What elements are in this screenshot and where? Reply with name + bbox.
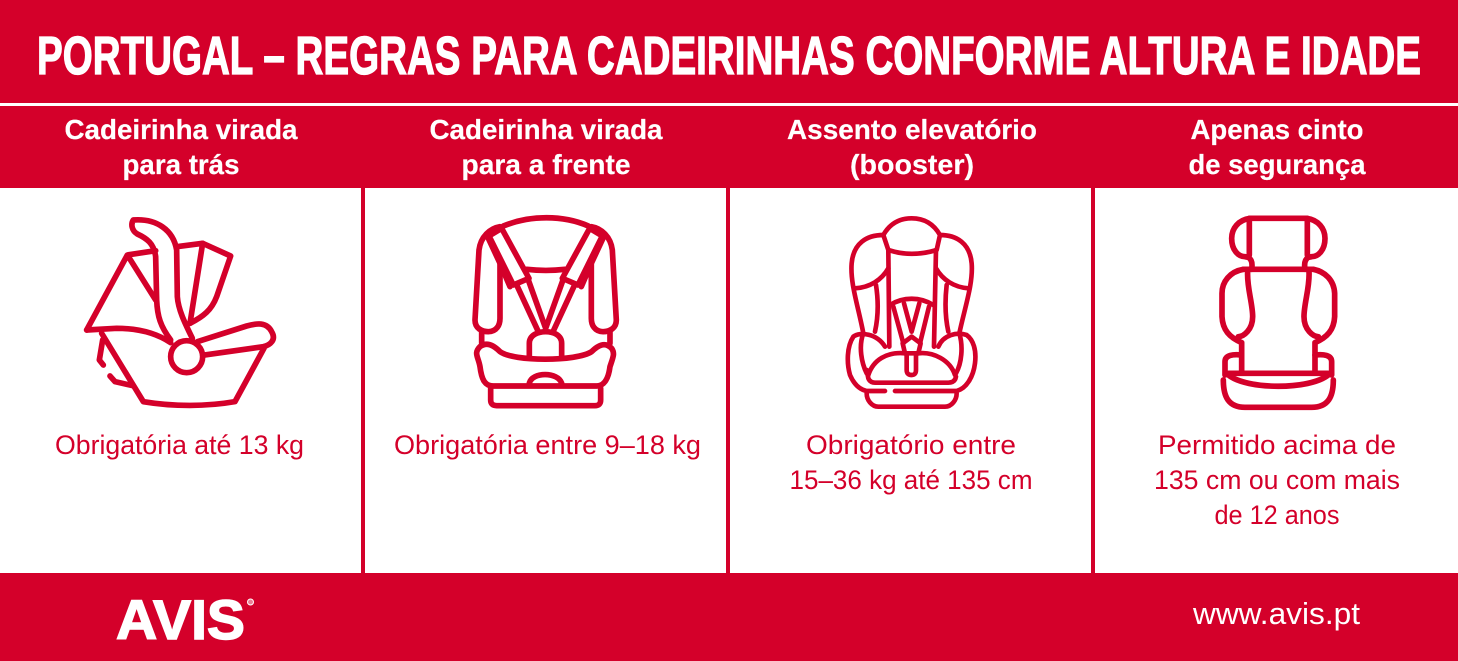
heading: seat belt only: Apenas cinto xyxy=(1190,114,1364,145)
panel: booster seat xyxy=(787,114,1037,495)
panel: forward-facing seat xyxy=(394,114,701,460)
heading: rear-facing seat: Cadeirinha virada xyxy=(64,114,298,145)
text: seat belt rule: de 12 anos xyxy=(1214,500,1340,530)
heading: booster seat: Assento elevatório xyxy=(787,114,1037,145)
footer band xyxy=(0,573,1458,661)
heading: rear-facing seat: para trás xyxy=(122,149,240,180)
title banner xyxy=(0,0,1458,103)
heading: forward-facing seat: para a frente xyxy=(462,149,630,180)
logo: AVIS: AVIS xyxy=(116,588,245,651)
icon: booster seat xyxy=(848,218,975,407)
panel: rear-facing seat xyxy=(55,114,304,460)
heading: seat belt only: de segurança xyxy=(1188,149,1366,180)
text: rear-facing rule: Obrigatória até 13 kg xyxy=(55,430,304,460)
website url: www.avis.pt xyxy=(1192,596,1360,631)
icon: backed booster xyxy=(1222,218,1335,407)
panel: seat belt only xyxy=(1154,114,1400,530)
text: booster rule: 15–36 kg até 135 cm xyxy=(790,465,1032,495)
icon: harness seat xyxy=(475,218,616,406)
text: forward-facing rule: Obrigatória entre 9–18 kg xyxy=(394,430,701,460)
column header band xyxy=(0,106,1458,188)
heading: booster seat: (booster) xyxy=(850,149,974,180)
heading: forward-facing seat: Cadeirinha virada xyxy=(430,114,663,145)
text: seat belt rule: Permitido acima de xyxy=(1158,430,1396,460)
icon: infant carrier xyxy=(87,220,273,405)
text: seat belt rule: 135 cm ou com mais xyxy=(1154,465,1400,495)
column dividers xyxy=(361,188,1095,574)
text: booster rule: Obrigatório entre xyxy=(806,430,1016,460)
